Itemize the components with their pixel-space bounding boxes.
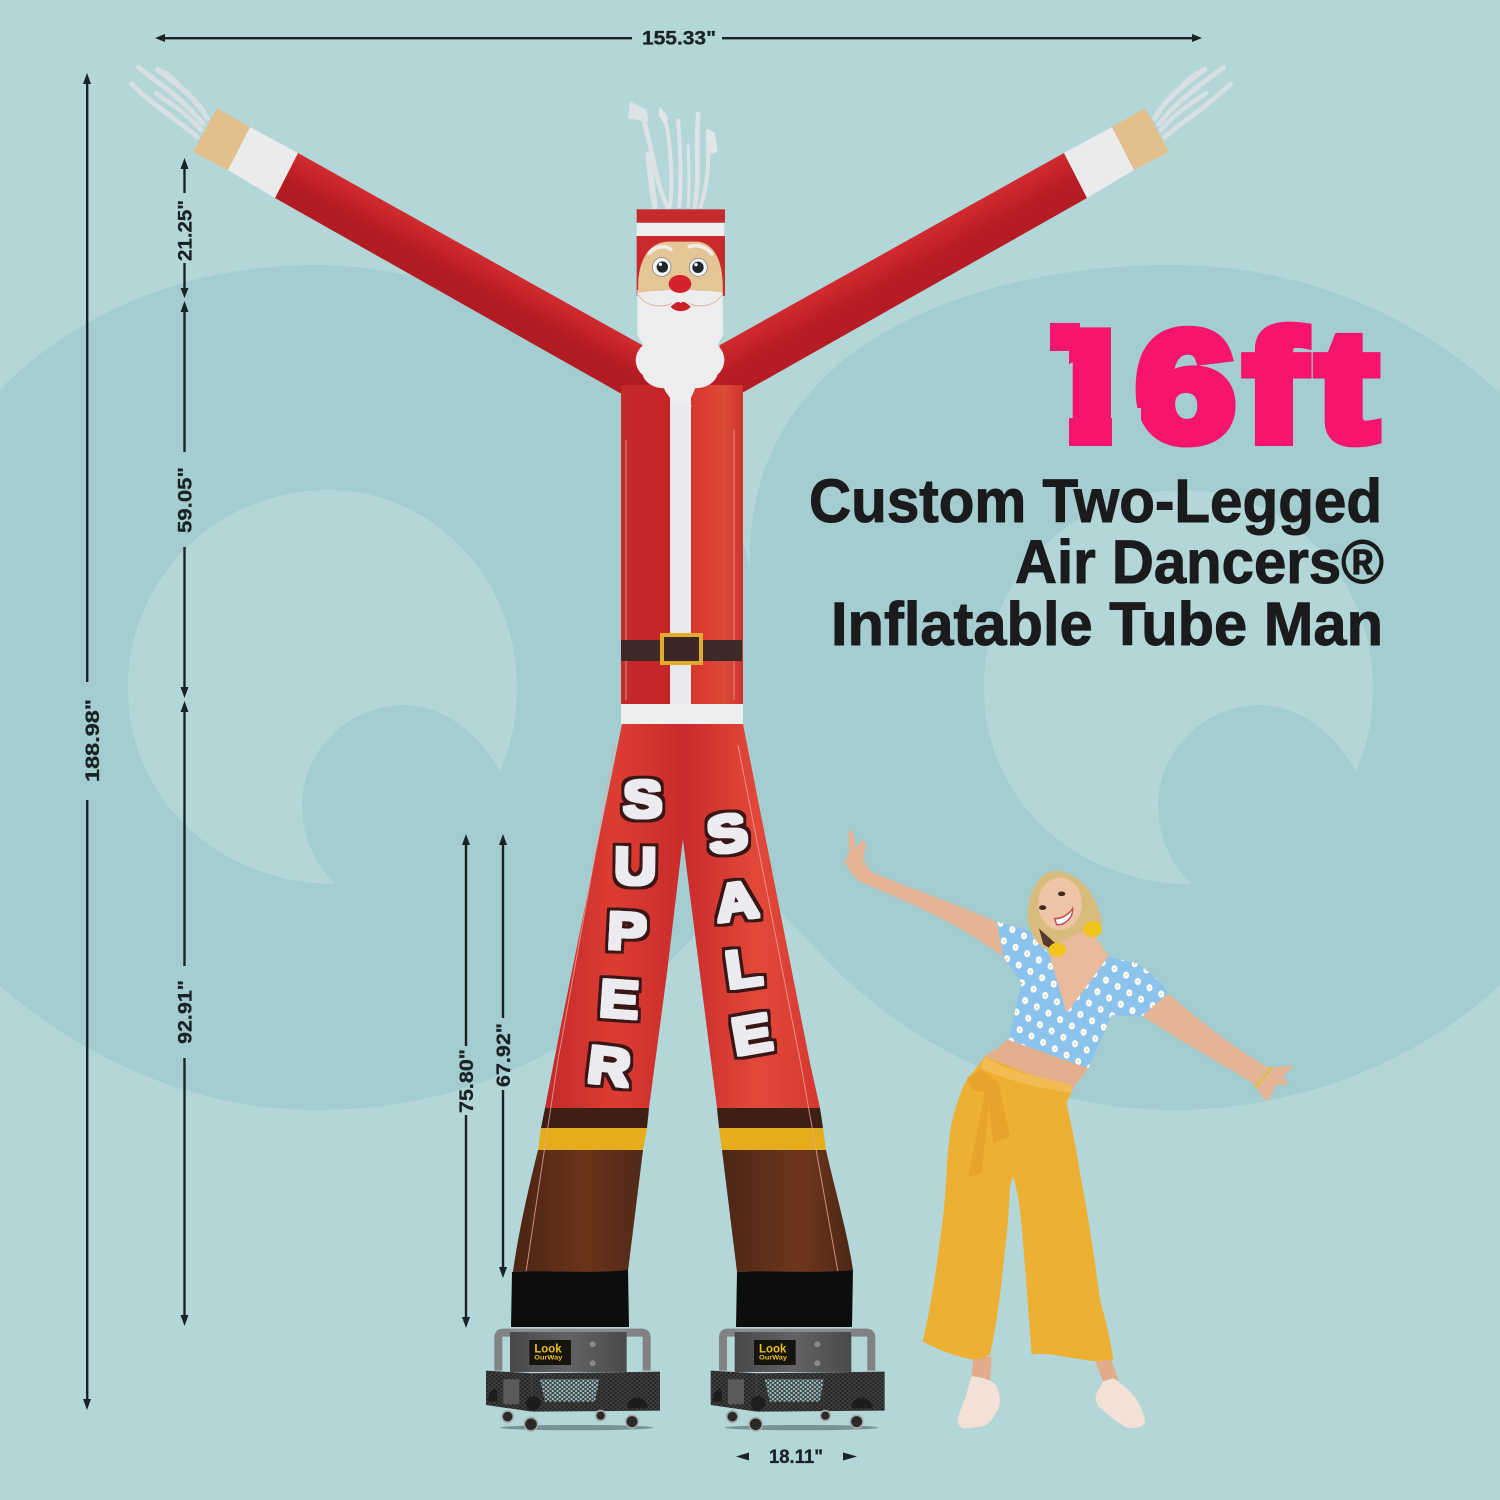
left blower xyxy=(486,1329,660,1431)
shoes xyxy=(958,1376,1145,1429)
logo: OurWay xyxy=(759,1354,787,1361)
neck and chest xyxy=(1049,927,1109,1015)
background wave shapes xyxy=(0,265,1500,1110)
height dimension: 188.98: 188.98" xyxy=(83,699,104,782)
width dimension: 155.33: 155.33" xyxy=(642,28,716,50)
width dimension: 155.33 xyxy=(155,28,1202,50)
dimension: 21.25 xyxy=(176,158,196,298)
dimension: 67.92: 67.92" xyxy=(494,1023,515,1087)
torso xyxy=(621,385,743,724)
logo xyxy=(529,1340,571,1365)
left leg xyxy=(513,724,683,1273)
left sock xyxy=(511,1270,629,1327)
face xyxy=(1032,871,1088,937)
inflatable tube man xyxy=(132,67,1230,1327)
right blower xyxy=(711,1329,885,1431)
dimension: 75.80: 75.80" xyxy=(457,1049,478,1113)
left arm streamers xyxy=(132,67,207,137)
leg lettering: SALE: S xyxy=(702,801,753,866)
right arm xyxy=(702,108,1169,395)
trousers xyxy=(923,1056,1113,1361)
leg lettering: SALE xyxy=(702,801,776,1066)
dimension: 75.80 xyxy=(457,834,478,1328)
mouth xyxy=(671,302,691,311)
eyebrows xyxy=(649,246,712,254)
head streamers xyxy=(628,102,717,207)
logo: Look xyxy=(534,1341,562,1355)
logo: OurWay xyxy=(534,1354,563,1361)
subtitle xyxy=(809,467,1384,658)
midriff xyxy=(983,1039,1089,1092)
dimension: 92.91: 92.91" xyxy=(176,980,196,1044)
nose xyxy=(669,275,691,293)
right leg xyxy=(683,724,853,1272)
leg lettering: SUPER: U xyxy=(613,837,657,896)
face xyxy=(638,242,723,293)
right arm streamers xyxy=(1155,67,1230,137)
right sock xyxy=(736,1270,853,1327)
leg lettering: SUPER: S xyxy=(622,770,663,829)
buckle xyxy=(662,635,701,663)
earrings xyxy=(1049,921,1102,957)
leg lettering: SALE: E xyxy=(727,1003,776,1066)
eyes and smile xyxy=(1039,891,1073,925)
ankles xyxy=(972,1357,1118,1382)
subtitle: Custom Two-Legged xyxy=(809,467,1382,535)
eyes xyxy=(652,258,671,276)
dimension: 21.25: 21.25" xyxy=(176,200,196,261)
logo xyxy=(754,1340,796,1365)
dimension: 59.05 xyxy=(176,301,196,698)
hair xyxy=(1028,871,1103,950)
title: 16ft: 16ft xyxy=(1038,301,1377,473)
leg lettering: SALE: A xyxy=(711,870,762,933)
belt xyxy=(621,640,742,661)
left arm xyxy=(193,108,660,395)
leg lettering: SUPER: R xyxy=(584,1035,634,1098)
santa head xyxy=(636,209,725,407)
leg lettering: SUPER: E xyxy=(597,969,641,1030)
dimension: 18.11: 18.11" xyxy=(769,1447,823,1468)
dimension: 18.11 xyxy=(736,1447,857,1468)
trouser ruffle xyxy=(980,1056,1072,1093)
woman for scale xyxy=(845,831,1294,1429)
waist band xyxy=(621,704,743,724)
beard xyxy=(636,290,724,407)
bracelet xyxy=(1255,1068,1272,1088)
leg lettering: SALE: L xyxy=(722,937,765,1000)
subtitle: Air Dancers® xyxy=(1015,528,1384,596)
height dimension: 188.98 xyxy=(83,73,104,1410)
hair shadow xyxy=(1039,929,1057,950)
leg lettering: SUPER xyxy=(584,770,663,1098)
woman's lowered arm xyxy=(1142,994,1294,1101)
woman's raised arm xyxy=(845,831,1005,958)
leg lettering: SUPER: P xyxy=(606,901,648,961)
logo: Look xyxy=(759,1341,787,1355)
trouser sash xyxy=(967,1069,1010,1176)
dimension: 92.91 xyxy=(176,701,196,1326)
dimension: 67.92 xyxy=(494,834,515,1278)
subtitle: Inflatable Tube Man xyxy=(831,590,1383,658)
dimension: 59.05: 59.05" xyxy=(176,467,196,533)
blouse xyxy=(997,921,1168,1068)
